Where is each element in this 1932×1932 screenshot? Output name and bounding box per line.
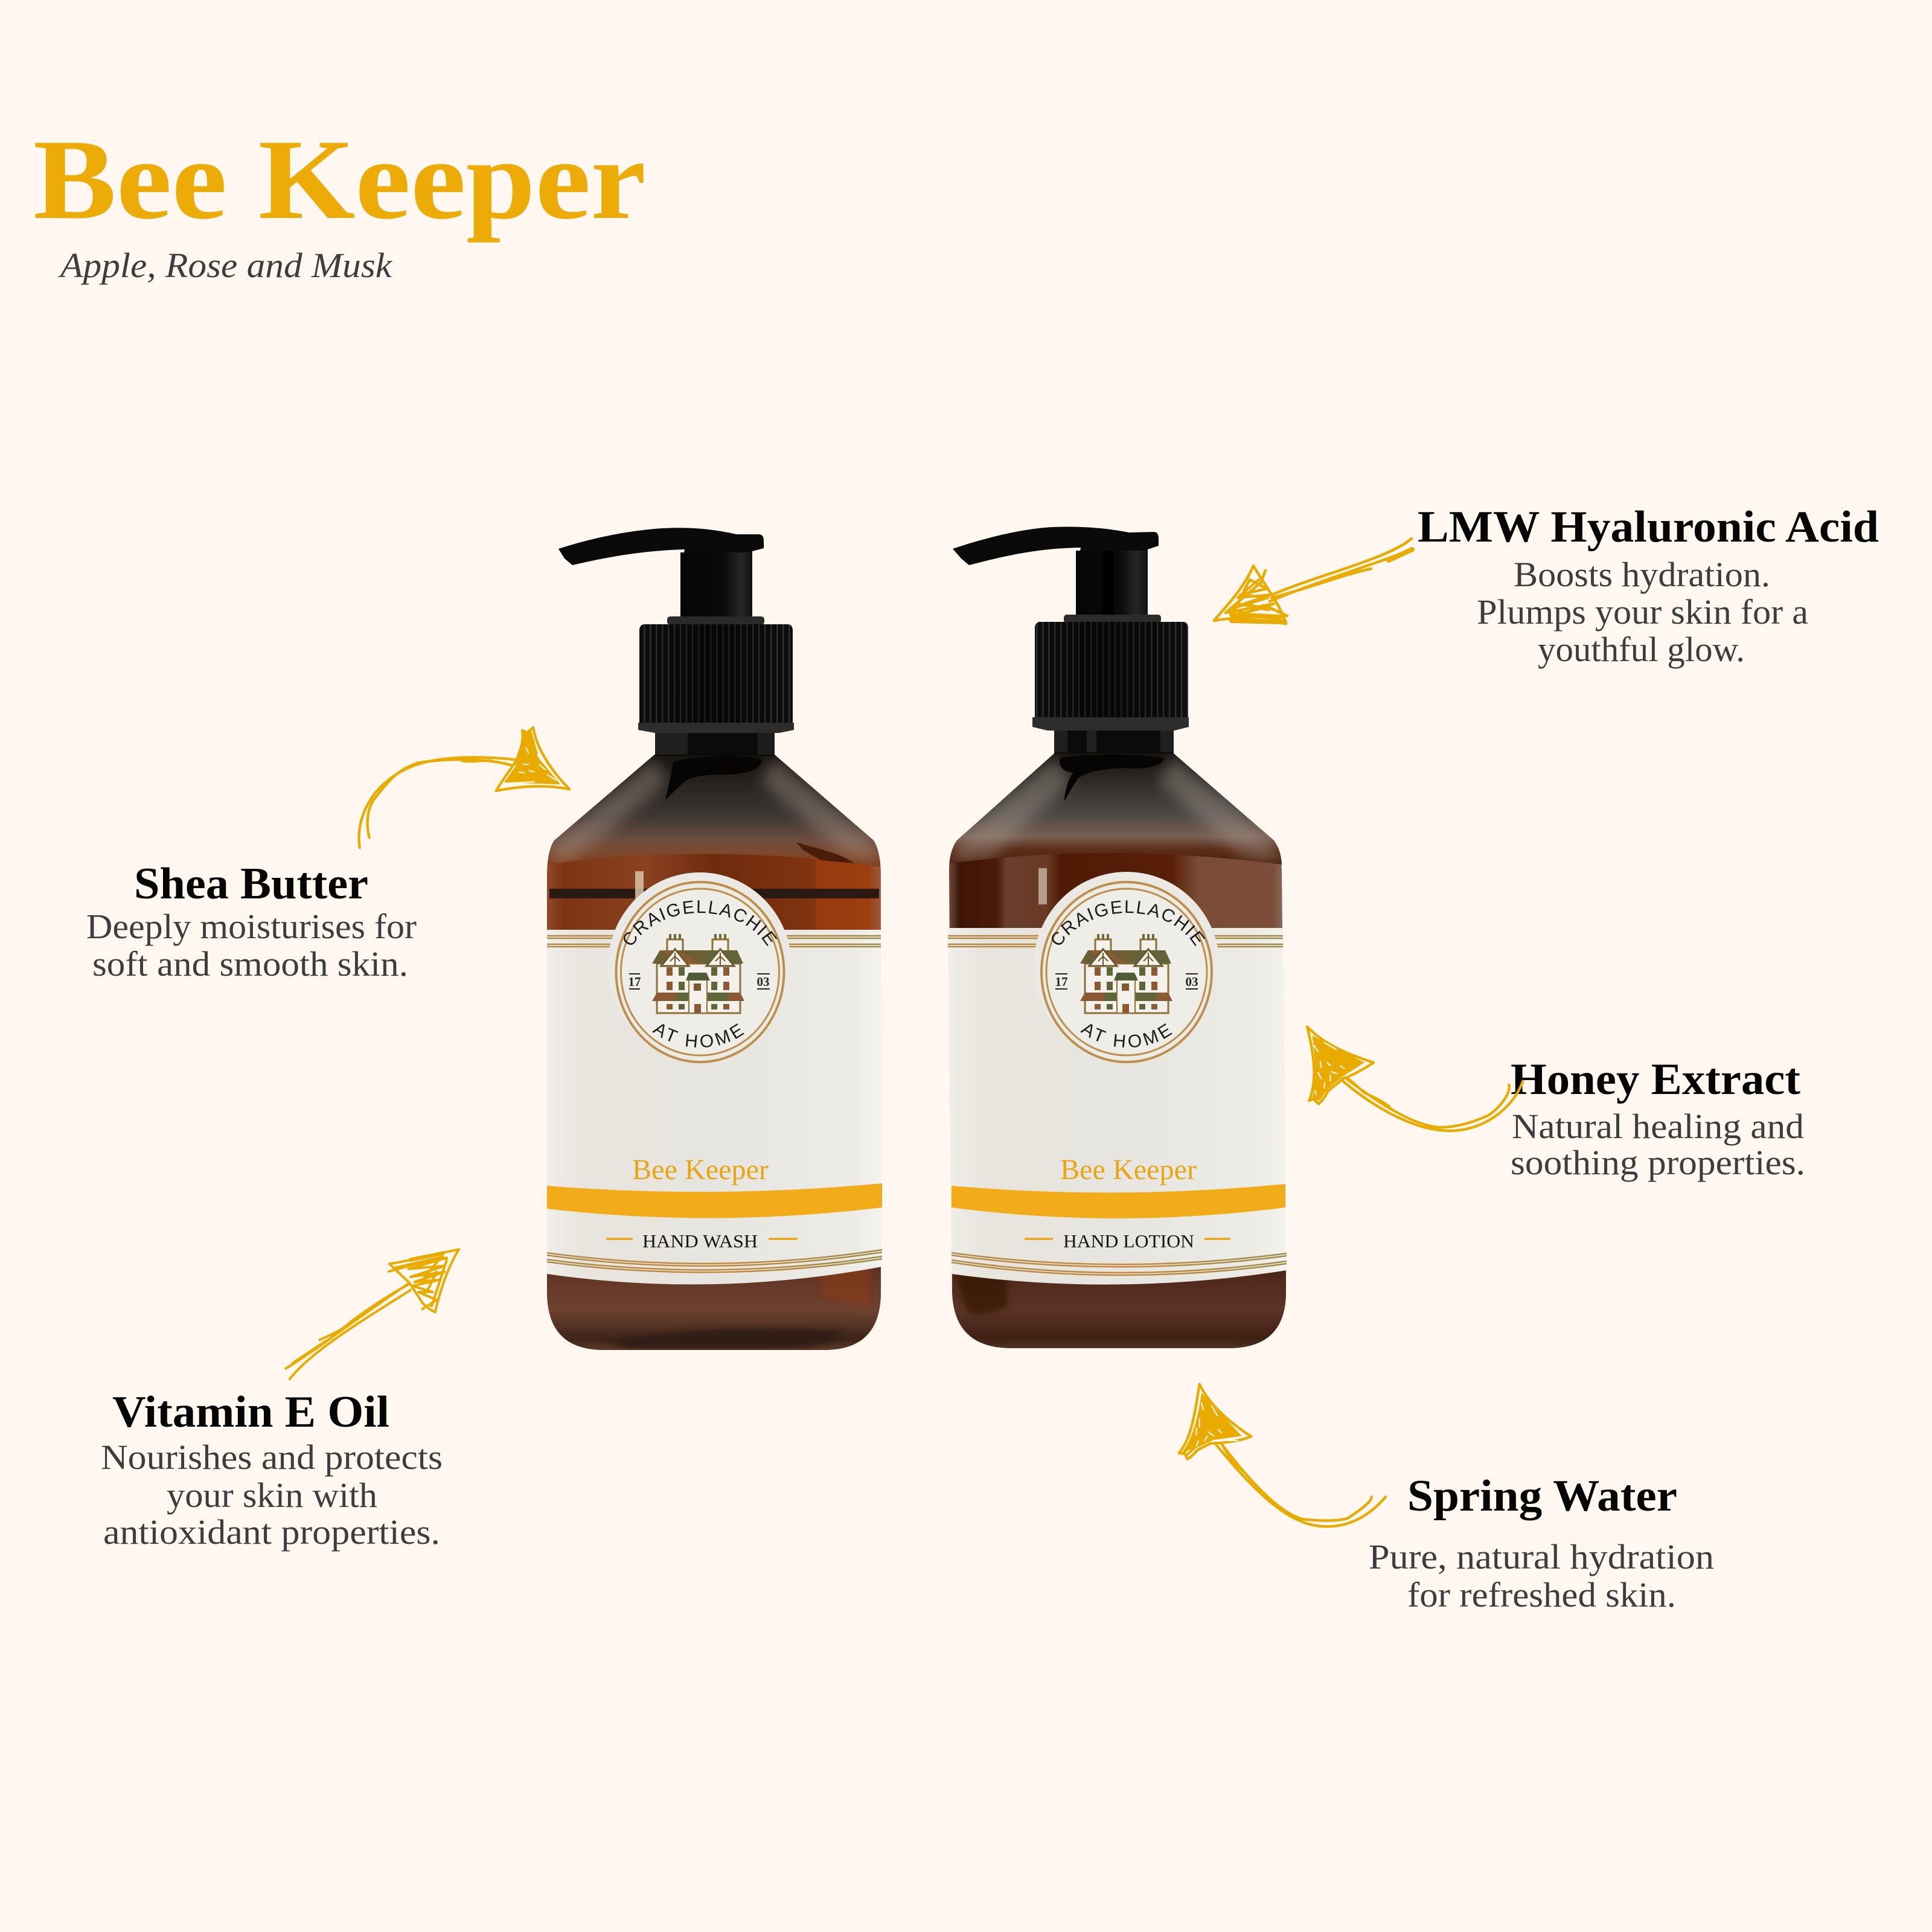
yellow band — [952, 1184, 1285, 1218]
callout: LMW Hyaluronic Acid: Boosts hydration. — [1514, 555, 1770, 594]
title: Bee Keeper — [33, 117, 646, 243]
emblem: 17 — [628, 974, 641, 989]
product: hand lotion bottle — [948, 526, 1287, 1348]
label — [547, 930, 882, 1284]
callout: Spring Water: Spring Water — [1407, 1471, 1677, 1521]
callout: LMW Hyaluronic Acid: youthful glow. — [1538, 630, 1745, 669]
callout: Honey Extract: Natural healing and — [1512, 1107, 1804, 1146]
bottle base — [547, 1262, 881, 1350]
product type: HAND WASH — [642, 1230, 758, 1252]
neck — [1054, 728, 1174, 753]
arrow: Honey Extract — [1307, 1027, 1523, 1131]
arrowhead fill — [1182, 1393, 1242, 1456]
pump collar — [667, 616, 764, 625]
callout: Shea Butter: Deeply moisturises for — [86, 907, 417, 946]
label — [948, 928, 1287, 1285]
arrowhead fill — [1312, 1035, 1364, 1101]
ribbed cap — [639, 624, 793, 723]
callout: Spring Water: for refreshed skin. — [1407, 1575, 1676, 1614]
bottle shoulder — [548, 755, 880, 867]
arrow: Spring Water — [1179, 1384, 1386, 1526]
emblem: AT HOME — [652, 1023, 744, 1048]
callout: Honey Extract — [1511, 1055, 1805, 1182]
arrowhead fill — [504, 731, 560, 784]
emblem: CRAIGELLACHIE — [1052, 900, 1205, 947]
arrow: Shea Butter — [359, 728, 569, 848]
callout: Vitamin E Oil: antioxidant properties. — [103, 1512, 440, 1552]
callout: LMW Hyaluronic Acid: LMW Hyaluronic Acid — [1418, 502, 1879, 552]
bottle body — [547, 755, 881, 1350]
yellow band — [547, 1183, 882, 1218]
callout: Vitamin E Oil — [101, 1387, 443, 1552]
arrow: LMW Hyaluronic Acid — [1214, 539, 1412, 624]
pump collar — [1064, 615, 1161, 623]
callout: Vitamin E Oil: your skin with — [167, 1476, 377, 1515]
callout: Shea Butter: Shea Butter — [134, 859, 368, 909]
product name: Bee Keeper — [1060, 1154, 1197, 1186]
emblem: CRAIGELLACHIE — [624, 900, 778, 947]
bottle base — [952, 1262, 1286, 1348]
dark liquid line — [549, 889, 879, 898]
emblem: 03 — [1186, 974, 1198, 989]
callout: LMW Hyaluronic Acid — [1418, 502, 1879, 669]
product type: HAND LOTION — [1063, 1230, 1194, 1252]
callout: Vitamin E Oil: Vitamin E Oil — [112, 1387, 389, 1437]
neck — [655, 731, 775, 756]
callout: Vitamin E Oil: Nourishes and protects — [101, 1438, 443, 1477]
pump spout — [953, 527, 1159, 615]
callout: Spring Water: Pure, natural hydration — [1369, 1537, 1714, 1576]
emblem: 17 — [1055, 974, 1067, 989]
callout: Shea Butter: soft and smooth skin. — [92, 944, 408, 984]
emblem: AT HOME — [1080, 1023, 1172, 1048]
ribbed cap — [1035, 622, 1188, 717]
subtitle: Apple, Rose and Musk — [58, 246, 392, 285]
callout: Honey Extract: Honey Extract — [1511, 1055, 1800, 1104]
bottle body — [949, 753, 1286, 1348]
bottle shoulder — [950, 753, 1282, 865]
callout: LMW Hyaluronic Acid: Plumps your skin for a — [1477, 592, 1808, 632]
callout: Honey Extract: soothing properties. — [1511, 1143, 1805, 1182]
product: hand wash bottle — [547, 528, 883, 1350]
arrow: Vitamin E Oil — [286, 1249, 459, 1379]
callout: Spring Water — [1369, 1471, 1714, 1614]
emblem: 03 — [757, 974, 769, 989]
pump spout — [558, 528, 764, 618]
emblem — [610, 872, 790, 1063]
callout: Shea Butter — [86, 859, 417, 984]
emblem — [1035, 872, 1218, 1063]
product name: Bee Keeper — [632, 1154, 769, 1186]
